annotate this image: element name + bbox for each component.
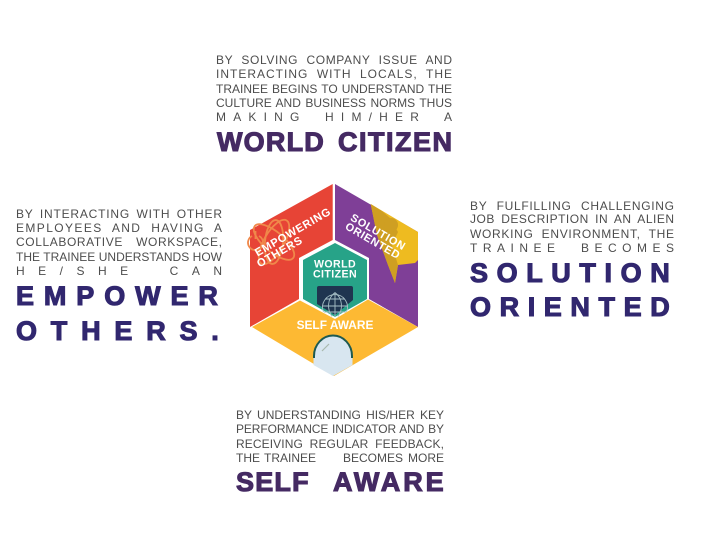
text block: world citizen: [216, 53, 459, 157]
label: world citizen: [313, 258, 357, 280]
heading: oriented: ORIENTED: [470, 292, 678, 322]
text block: self aware: RECEIVING REGULAR FEEDBACK,: [236, 437, 444, 451]
text block: empower others: THE TRAINEE UNDERSTANDS HOW: [16, 250, 222, 264]
text block: empower others: HE/SHE CAN: [16, 264, 236, 278]
label: empowering others: OTHERS: [255, 234, 305, 270]
icon: rocket: [371, 204, 418, 283]
text block: empower others: EMPLOYEES AND HAVING A: [16, 221, 223, 235]
text block: solution oriented: TRAINEE BECOMES: [470, 241, 680, 255]
label: self aware: SELF AWARE: [297, 318, 373, 332]
heading: self aware: AWARE: [333, 467, 447, 497]
panel: solution oriented: [335, 184, 418, 327]
panel: world citizen: [303, 243, 367, 317]
heading: world citizen: WORLD: [217, 127, 325, 157]
text block: self aware: PERFORMANCE INDICATOR AND BY: [236, 422, 444, 436]
heading: self aware: SELF: [236, 467, 310, 497]
heading: empower: EMPOWER: [16, 281, 228, 311]
label: empowering others: EMPOWERING: [253, 206, 333, 259]
text block: world citizen: BY SOLVING COMPANY ISSUE AND: [216, 53, 453, 67]
label: solution oriented: SOLUTION: [348, 212, 407, 253]
icon: mirror: [314, 335, 352, 376]
label: solution oriented: ORIENTED: [343, 221, 402, 262]
text block: empower others: COLLABORATIVE WORKSPACE,: [16, 235, 223, 249]
text block: solution oriented: WORKING ENVIRONMENT, THE: [470, 227, 675, 241]
label: world citizen: CITIZEN: [313, 268, 357, 280]
text block: solution oriented: BY FULFILLING CHALLENGING: [470, 199, 675, 213]
heading: solution: SOLUTION: [470, 258, 678, 288]
text block: solution oriented: [470, 199, 680, 322]
panel: self aware: [252, 300, 418, 376]
text block: world citizen: TRAINEE BEGINS TO UNDERSTAND THE: [216, 82, 452, 96]
icon: passport globe: [317, 286, 353, 316]
heading: world citizen: CITIZEN: [338, 127, 454, 157]
heading: others: OTHERS.: [16, 316, 233, 346]
panel: empowering others: [248, 184, 333, 327]
text block: self aware: BY UNDERSTANDING HIS/HER KEY: [236, 408, 444, 422]
label: world citizen: WORLD: [314, 258, 356, 270]
text block: self aware: THE TRAINEE: [236, 451, 316, 465]
text block: empower others: BY INTERACTING WITH OTHER: [16, 207, 223, 221]
text block: self aware: BECOMES MORE: [343, 451, 444, 465]
text block: world citizen: CULTURE AND BUSINESS NORMS THUS: [216, 96, 452, 110]
text block: empower others: [16, 207, 236, 346]
text block: world citizen: INTERACTING WITH LOCALS, THE: [216, 67, 453, 81]
heading: world citizen: [216, 127, 454, 157]
icon: atom outline: [248, 215, 300, 269]
heading: self aware: [236, 467, 447, 497]
text block: self aware: [236, 408, 447, 497]
text block: solution oriented: JOB DESCRIPTION IN AN ALIEN: [470, 212, 674, 226]
text block: world citizen: MAKING HIM/HER A: [216, 110, 459, 124]
